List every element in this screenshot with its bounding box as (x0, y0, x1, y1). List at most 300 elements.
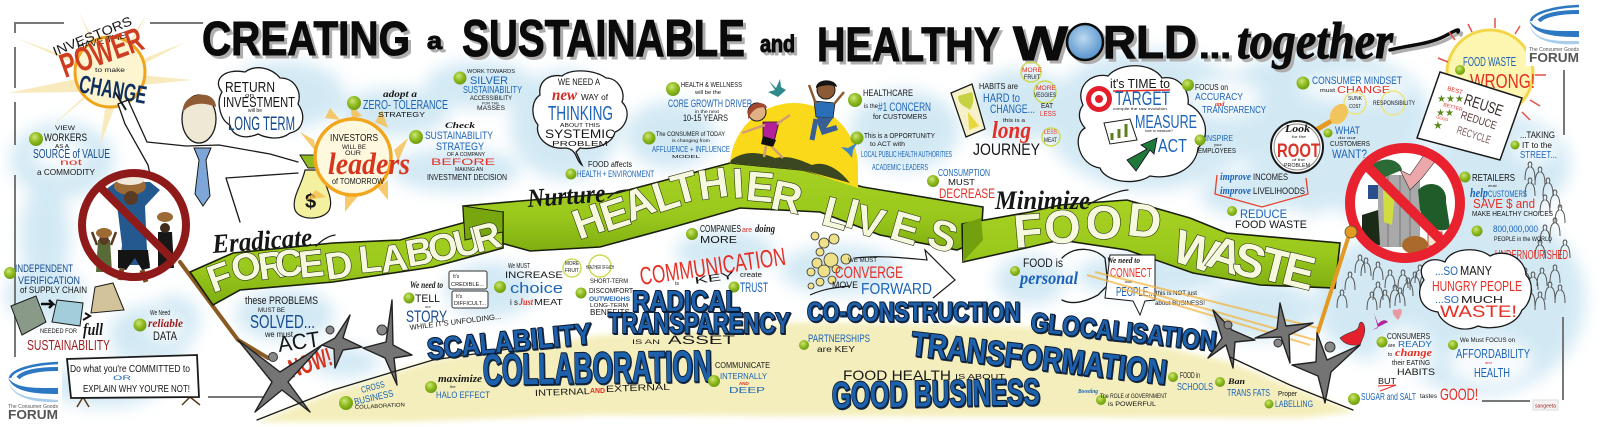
speech: connect with people (1062, 249, 1205, 315)
text: consumers are ready to change: their EATING (1392, 360, 1430, 367)
text: role of government: The ROLE of GOVERNMENT (1100, 393, 1167, 400)
text: health and wellness: in the next (695, 109, 720, 114)
text: independent verification: VERIFICATION (18, 275, 80, 287)
text: opportunity to act: LOCAL PUBLIC HEALTH AUTHORITIES (861, 150, 952, 159)
text: needed for full sustainability: full (83, 320, 103, 339)
text: consumer of today: is changing from (672, 138, 710, 143)
text: these problems must be solved (245, 295, 336, 384)
text: consumers are ready to change: CONSUMERS (1387, 331, 1430, 341)
big lettering: hill words (426, 286, 1217, 416)
text: taking it to the street: STREET... (1520, 150, 1557, 161)
text: consumption must decrease: CONSUMPTION (938, 168, 990, 179)
text: focus on accuracy: TRANSPARENCY (1202, 105, 1266, 116)
text: maximize halo effect (425, 373, 490, 400)
text: improve incomes, reduce food waste: FOOD WASTE (1235, 219, 1307, 231)
text: focus on accuracy: FOCUS on (1195, 83, 1228, 92)
text: consumer mindset: CONSUMER MINDSET (1312, 75, 1402, 87)
text: internal and external: INTERNAL (535, 386, 590, 398)
sign: reuse reduce recycle: BETTER (1442, 102, 1463, 113)
text: retailers must help customers save: help (1470, 185, 1488, 200)
text: silver sustainability (454, 69, 522, 112)
text: improve incomes, reduce food waste (1215, 171, 1308, 231)
logo: consumer goods forum, top right (1526, 2, 1582, 66)
text: tell our story: It's (456, 294, 463, 300)
text: must increase choice: FRUIT (565, 268, 579, 274)
text: independent verification: of SUPPLY CHAIN (20, 285, 87, 295)
text: view workers as a source of value: SOURCE of VALUE (33, 146, 110, 161)
text: habits are hard to change: JOURNEY (973, 140, 1040, 159)
title: SUSTAINABLE (462, 10, 745, 68)
text: partnerships are key: are KEY (817, 345, 856, 354)
text: silver sustainability: SILVER (470, 75, 508, 87)
text: consumer mindset: must (1320, 88, 1336, 94)
text: we need reliable data (134, 310, 184, 343)
text: more fruit, veggies, eat less, less meat: VEGGIES (1034, 93, 1056, 99)
text: communicate internally and deep (708, 360, 770, 395)
flag pole knob (1345, 226, 1357, 238)
logo: consumer goods forum, bottom left: FORUM (8, 407, 58, 422)
cloud: so many hungry people: MANY (1460, 263, 1492, 278)
speech: companies are doing more: COMPANIES (700, 224, 741, 235)
orange streaks behind figures (1087, 272, 1318, 345)
text: we need reliable data: reliable (148, 316, 184, 330)
text: we need reliable data: We Need (150, 310, 170, 317)
text: must increase choice: INCREASE (505, 270, 563, 281)
transformation: TRANSFORMATION (909, 325, 1169, 392)
text: check sustainability strategy: Check (445, 121, 475, 130)
icon: bubbles and converge arrow: CONVERGE (835, 263, 903, 282)
cloud: new way of thinking: PROBLEM (552, 141, 608, 148)
children jumping (742, 80, 844, 158)
glocalisation: GLOCALISATION (1029, 307, 1217, 356)
text: tell our story: We need to (410, 280, 443, 290)
hair (183, 95, 216, 112)
text: healthcare concern: is the (864, 104, 879, 110)
no symbol (82, 173, 186, 277)
text: habits are hard to change (973, 81, 1040, 159)
text: must increase choice: We MUST (508, 263, 530, 270)
cloud: time to target, measure, act: how to measure? (1145, 128, 1174, 133)
icon: bubbles and converge arrow (807, 232, 955, 298)
collaboration: COLLABORATION (482, 342, 712, 395)
text: communicate internally and deep: AND (739, 381, 749, 386)
sun: food waste is wrong: FOOD WASTE (1463, 55, 1516, 69)
speech: connect with people: this is NOT just (1156, 290, 1197, 297)
sun: investors will be our leaders: of TOMORROW (332, 176, 384, 186)
sunburst: investors have the power: POWER (55, 20, 149, 86)
text: communicate internally and deep: DEEP (729, 385, 765, 395)
title: HEALTHY (817, 19, 1000, 72)
thought cloud: return on investment (218, 68, 303, 138)
text: more fruit, veggies, eat less, less meat: MORE (1036, 85, 1057, 92)
thought cloud: return on investment: LONG TERM (228, 114, 295, 135)
text: needed for full sustainability (27, 320, 110, 354)
logo: consumer goods forum, bottom left: The Consumer Goods (8, 404, 58, 410)
co-construction: CO-CONSTRUCTION (807, 297, 1020, 327)
text: role of government: is POWERFUL (1108, 401, 1156, 408)
text: 800,000,000 undernourished: 800,000,000 (1493, 224, 1538, 234)
text: more fruit, veggies, eat less, less meat: FRUIT (1024, 75, 1040, 81)
text: inspire employees: EMPLOYEES (1198, 148, 1236, 155)
text: more fruit, veggies, eat less, less meat: MEAT (1044, 138, 1057, 144)
heading: eradicate: Eradicate (210, 222, 313, 259)
cloud: so many hungry people (1420, 250, 1531, 329)
text: health and wellness: HEALTH & WELLNESS (681, 80, 742, 89)
icon: magnifying glass, look for the root: ROOT (1277, 141, 1320, 162)
speech: connect with people: CONNECT (1110, 266, 1152, 280)
text: habits are hard to change: HABITS are (979, 81, 1018, 91)
title: together (1237, 13, 1394, 70)
text: retailers must help customers save: CUSTOMERS (1488, 189, 1527, 199)
cloud: new way of thinking: SYSTEMIC (545, 127, 615, 141)
head (182, 95, 216, 143)
text: consumer mindset: COST (1349, 104, 1361, 110)
text: improve incomes, reduce food waste: LIVELIHOODS (1253, 186, 1305, 197)
sunburst: investors have the power (8, 10, 192, 145)
cloud: time to target, measure, act: compile the raw evolution (1113, 106, 1167, 111)
text: is an asset (632, 333, 736, 347)
text: role of government (1077, 389, 1167, 408)
text: health and wellness: 10-15 YEARS (683, 113, 728, 124)
text: improve incomes, reduce food waste: REDUCE (1240, 207, 1287, 221)
text: improve incomes, reduce food waste: improve (1220, 185, 1251, 197)
sun: investors will be our leaders: leaders (328, 146, 410, 181)
radical: RADICAL (632, 286, 740, 318)
title: W (1013, 18, 1069, 71)
cloud: time to target, measure, act: TARGET (1115, 89, 1170, 110)
text: cross business collaboration: COLLABORATION (355, 402, 405, 411)
text: health and wellness: will be the (695, 90, 721, 96)
text: communication is key, create trust (638, 243, 787, 295)
speech: companies are doing more: doing (755, 224, 775, 235)
title: RLD (1103, 16, 1197, 68)
arrow (810, 250, 955, 298)
sign: reuse reduce recycle: RECYCLE (1455, 124, 1492, 147)
text: 800,000,000 undernourished (1472, 224, 1568, 262)
text: ban trans fats: TRANS FATS (1227, 388, 1270, 399)
text: check sustainability strategy: MAKING AN (455, 167, 483, 173)
text: needed for full sustainability: SUSTAINABILITY (27, 337, 110, 354)
text: habits are hard to change: HARD to (983, 91, 1020, 105)
text: communication is key, create trust: is (675, 281, 679, 287)
text: view workers as a source of value: a COMMODITY (37, 167, 95, 177)
text: view workers as a source of value: WORKERS (44, 132, 87, 144)
text: taking it to the street: ...TAKING (1520, 130, 1555, 140)
good business: GOOD BUSINESS (831, 371, 1040, 416)
text: view workers as a source of value: VIEW (55, 126, 75, 132)
text: consumers are ready to change: change (1395, 347, 1432, 359)
text: short-term discomfort: DISCOMFORT (589, 286, 633, 295)
icon: magnifying glass, look for the root: of the (1292, 158, 1305, 162)
speech: companies are doing more: MORE (700, 235, 737, 246)
text: short-term discomfort: BENEFITS (590, 308, 630, 317)
banner text: healthier lives: HEALTHIER LIVES (566, 158, 963, 262)
text: focus on affordability: We Must FOCUS on (1460, 337, 1515, 344)
title: a (427, 28, 443, 55)
cloud: time to target, measure, act: MEASURE (1135, 112, 1197, 132)
text: opportunity to act (850, 131, 952, 172)
logo: consumer goods forum, top right: FORUM (1529, 50, 1579, 65)
text: food in schools (1168, 371, 1213, 393)
text: communication is key, create trust: KEY (694, 270, 736, 287)
text: consumption must decrease: DECREASE (939, 185, 995, 201)
text: consumer of today: MODEL (672, 154, 701, 159)
text: communicate internally and deep: INTERNALLY (720, 371, 767, 381)
icon: magnifying glass, look for the root: Look (1284, 123, 1311, 135)
text: retailers must help customers save: MAKE HEALTHY CHOICES (1472, 211, 1553, 218)
text: but sugar and salt tastes good: GOOD! (1440, 385, 1478, 404)
sign: reuse reduce recycle (1417, 72, 1522, 160)
text: more fruit, veggies, eat less, less meat: LESS (1040, 109, 1056, 118)
text: consumers are ready to change: to (1388, 352, 1392, 358)
text: habits are hard to change: CHANGE... (990, 102, 1035, 116)
icon: money bag: $ (305, 191, 316, 213)
ribbon: food waste (962, 200, 1340, 288)
text: communicate internally and deep: COMMUNICATE (715, 360, 770, 370)
cloud: new way of thinking: WE NEED A (558, 77, 601, 88)
text: more fruit, veggies, eat less, less meat (1021, 62, 1060, 146)
text: tell our story: WHILE IT'S UNFOLDING... (409, 312, 502, 332)
text: tell our story: CREDIBLE... (451, 282, 484, 288)
text: silver sustainability: WORK TOWARDS (467, 69, 516, 75)
logo: consumer goods forum, top right: The Consumer Goods (1529, 47, 1579, 53)
text: independent verification: INDEPENDENT (15, 263, 73, 275)
text: maximize halo effect: the (450, 384, 456, 389)
text: but sugar and salt tastes good (1348, 377, 1478, 405)
text: check sustainability strategy: OF A COMPANY (447, 152, 485, 158)
text: partnerships are key (799, 333, 870, 354)
cloud: so many hungry people: HUNGRY PEOPLE (1432, 278, 1522, 295)
ribbon: healthier lives (463, 163, 983, 251)
star figures: right group (1208, 303, 1360, 410)
icons: butterflies (768, 79, 858, 158)
prohibition sign: forced labour (79, 170, 189, 282)
icons: supply chain pictures (11, 283, 124, 335)
trash can with food (1362, 155, 1450, 254)
banner text: food waste: FOOD WASTE (1011, 192, 1321, 300)
text: what do our customers want: do our (1338, 135, 1357, 140)
thought cloud: return on investment: on (245, 93, 254, 99)
text: check sustainability strategy (409, 121, 507, 182)
text: is an asset: IS AN (632, 339, 661, 346)
bubbles (807, 232, 851, 289)
text: food affects health: FOOD affects (588, 160, 632, 169)
text: is an asset: ASSET (668, 333, 736, 347)
sunburst: investors have the power: HAVE THE (76, 30, 127, 52)
text: opportunity to act: to ACT with (870, 141, 905, 148)
text: these problems must be solved: ACT (276, 326, 321, 357)
sign: reuse reduce recycle: BEST (1446, 86, 1463, 96)
text: retailers must help customers save (1460, 172, 1553, 218)
banner headings (202, 158, 1321, 301)
text: opportunity to act: ACADEMIC LEADERS (872, 163, 928, 172)
businessman figure (115, 92, 298, 222)
sun: food waste is wrong: WRONG! (1470, 71, 1535, 93)
text: consumption must decrease (927, 168, 995, 201)
thought cloud: return on investment: INVESTMENT (223, 94, 295, 111)
title: ... (1199, 28, 1231, 66)
title: and (760, 31, 795, 58)
cloud: time to target, measure, act (1078, 66, 1205, 182)
text: healthcare concern: #1 CONCERN (878, 100, 931, 114)
text: short-term discomfort (576, 278, 633, 317)
swashes (316, 190, 1128, 246)
text: must increase choice: choice (510, 280, 563, 297)
text: focus on affordability (1448, 337, 1530, 380)
text: partnerships are key: PARTNERSHIPS (808, 333, 870, 345)
speech: connect with people: We need to (1107, 256, 1140, 265)
text: short-term discomfort: SHORT-TERM (590, 278, 628, 285)
text: focus on affordability: HEALTH (1474, 365, 1510, 380)
crowd of people (1337, 162, 1570, 310)
thought cloud: return on investment: will be (248, 108, 262, 114)
text: more fruit, veggies, eat less, less meat: EAT (1041, 103, 1054, 110)
text: improve incomes, reduce food waste: improve (1220, 171, 1251, 183)
ribbon: forced labour (190, 212, 503, 305)
text: food affects health (566, 160, 654, 180)
text: these problems must be solved: MUST BE (258, 308, 285, 314)
sign: committed or explain: EXPLAIN WHY YOU'RE NOT! (83, 383, 190, 395)
text: cross business collaboration: CROSS (360, 379, 386, 395)
text: consumer of today: The CONSUMER of TODAY (656, 131, 726, 138)
text: tell our story: TELL (415, 293, 440, 305)
tie (194, 148, 211, 206)
text: inspire employees (1194, 133, 1236, 155)
icon: bubbles and converge arrow: WE MUST (848, 258, 877, 264)
cloud: new way of thinking: THINKING (548, 103, 613, 125)
sunburst: investors have the power: INVESTORS (51, 13, 134, 59)
text: needed for full sustainability: NEEDED FOR (40, 328, 77, 335)
logo: consumer goods forum, bottom left (4, 358, 62, 424)
heading: minimize: Minimize (994, 186, 1090, 215)
text: 800,000,000 undernourished: PEOPLE in the WORLD (1494, 236, 1552, 243)
cloud: new way of thinking: WAY of (581, 93, 609, 102)
text: consumers are ready to change: READY (1398, 340, 1433, 349)
text: taking it to the street: IT to the (1522, 141, 1553, 150)
text: internal and external: EXTERNAL (606, 382, 670, 394)
sun: investors will be our leaders: OUR (345, 151, 362, 157)
text: ban trans fats (1215, 377, 1270, 399)
text: healthcare concern: HEALTHCARE (863, 88, 913, 98)
left flag pole (180, 262, 268, 358)
text: but sugar and salt tastes good: tastes (1420, 393, 1438, 400)
thought cloud: return on investment: RETURN (225, 79, 275, 96)
sun with bushes (730, 103, 858, 188)
text: view workers as a source of value: AS A (55, 144, 70, 150)
heading: nurture: Nurture (525, 179, 606, 213)
text: food health is about: FOOD HEALTH (843, 367, 951, 383)
text: silver sustainability: ACCESSIBILITY (470, 96, 512, 102)
sign: reuse reduce recycle: REUSE (1462, 92, 1505, 120)
sun: investors will be our leaders: WILL BE (342, 145, 366, 151)
title (202, 10, 1458, 72)
cloud: so many hungry people: ...SO (1435, 295, 1459, 306)
text: communication is key, create trust: TRUST (740, 279, 768, 295)
text: must increase choice: MORE (565, 261, 580, 267)
sign: reuse reduce recycle: ★ (1433, 120, 1443, 132)
sign: reuse reduce recycle: ★★ (1436, 108, 1454, 119)
text: but sugar and salt tastes good: BUT (1378, 377, 1396, 386)
text: focus on accuracy: and (1215, 102, 1225, 108)
signature tag (1533, 400, 1558, 410)
text: consumption must decrease: MUST (948, 178, 975, 187)
text: tell our story: our (425, 304, 431, 309)
pointing finger (115, 92, 126, 110)
text: food in schools: SCHOOLS (1177, 382, 1213, 393)
icon: hourglass (951, 84, 985, 137)
text: food health is about: IS ABOUT (955, 374, 1006, 381)
text: internal and external (535, 382, 670, 398)
text: health and wellness (666, 80, 752, 124)
icon: bubbles and converge arrow: FORWARD (861, 281, 932, 298)
text: taking it to the street (1510, 130, 1557, 161)
text: these problems must be solved: these PROBLEMS (245, 295, 318, 307)
text: food is personal: personal (1018, 268, 1078, 288)
text: consumer of today (642, 131, 730, 159)
text: ban trans fats: Ban (1227, 377, 1246, 386)
girl (742, 103, 790, 158)
icon: magnifying glass, look for the root: for the (1292, 134, 1307, 139)
text: zero tolerance: adopt a (383, 89, 418, 99)
workers with baskets (92, 173, 174, 282)
text: what do our customers want: WHAT (1335, 125, 1360, 137)
text: consumers are ready to change: are (1388, 343, 1395, 349)
text: food is personal (1010, 256, 1078, 288)
text: cross business collaboration (339, 379, 405, 411)
text: food in schools: FOOD in (1180, 371, 1200, 380)
signature tag: sangeeta (1535, 404, 1556, 410)
sun: investors will be our leaders (300, 103, 410, 212)
speech: companies are doing more (686, 224, 775, 246)
text: food is personal: FOOD is (1023, 256, 1063, 270)
boy (809, 80, 844, 140)
text: check sustainability strategy: SUSTAINABILITY (425, 130, 494, 142)
sign: committed or explain (67, 355, 200, 407)
text: but sugar and salt tastes good: SUGAR and SALT (1361, 392, 1416, 403)
text: consumers are ready to change (1376, 331, 1435, 377)
sunburst: investors have the power: CHANGE (77, 70, 149, 110)
sign: committed or explain: Do what you're COMMITTED to (70, 364, 190, 375)
text: silver sustainability: FOR THE (482, 100, 499, 106)
text: what do our customers want (1324, 125, 1370, 161)
sign: reuse reduce recycle: ★★★ (1437, 94, 1464, 105)
right flag pole (1318, 232, 1350, 332)
speech: connect with people: PEOPLE... (1116, 284, 1155, 299)
text: maximize halo effect: maximize (438, 373, 482, 385)
icon: magnifying glass, look for the root: PROBLEM (1284, 163, 1310, 169)
icon: bubbles and converge arrow: MOVE (832, 280, 858, 290)
text: zero tolerance (347, 89, 448, 119)
text: food affects health: HEALTH + ENVIRONMENT (577, 169, 654, 179)
text: what do our customers want: WANT? (1332, 147, 1367, 161)
text: view workers as a source of value (29, 126, 110, 177)
text: inspire employees: your (1214, 142, 1222, 147)
text: must increase choice: MEAT (534, 298, 563, 307)
ribbon banner (190, 163, 1340, 305)
text: focus on affordability: AFFORDABILITY (1456, 346, 1530, 361)
banner text: forced labour: FORCED LABOUR (202, 214, 506, 301)
text: consumer mindset: SUNK (1348, 96, 1363, 102)
cloud: so many hungry people: MUCH (1461, 295, 1503, 306)
scalability: SCALABILITY (426, 318, 593, 366)
icon: magnifying glass, look for the root (1271, 100, 1352, 173)
text: tell our story: It's (453, 274, 460, 280)
text: independent verification (4, 263, 87, 295)
cloud: time to target, measure, act: it's TIME to (1110, 76, 1170, 91)
text: healthcare concern (848, 88, 931, 121)
text: improve incomes, reduce food waste: INCOMES (1253, 172, 1288, 183)
text: must increase choice: Just (518, 297, 533, 307)
